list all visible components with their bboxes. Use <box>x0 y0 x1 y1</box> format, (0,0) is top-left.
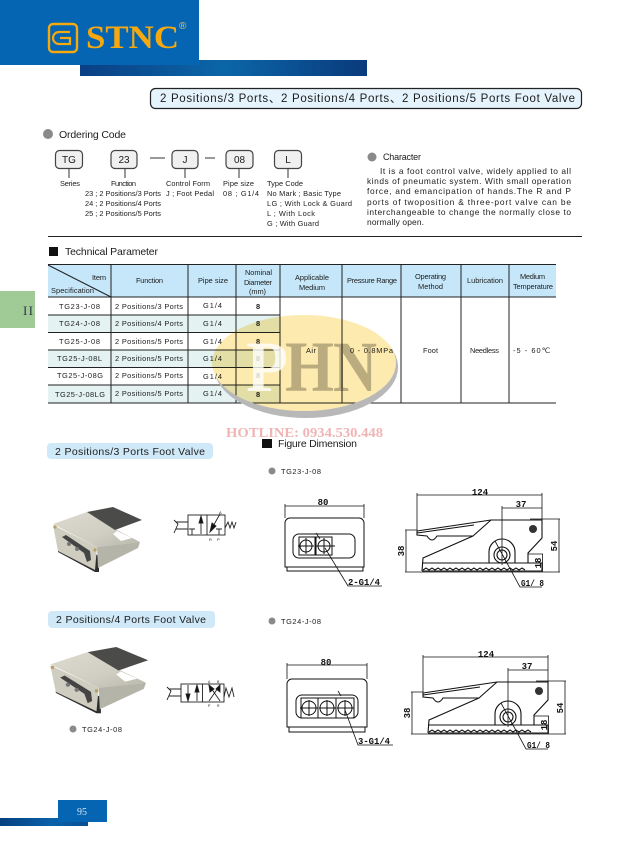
table rows: TG25-J-08L <box>57 354 102 363</box>
code legends: G ; With Guard <box>267 219 319 228</box>
symbol: 4 port valve: B <box>217 680 220 684</box>
table rows: TG25-J-08G <box>57 371 103 380</box>
table values over watermark: Air <box>306 346 317 355</box>
technical parameter heading: Technical Parameter <box>65 246 158 258</box>
table rows: 8 <box>256 337 260 346</box>
connectors <box>69 158 288 178</box>
symbol: 4 port valve: R <box>217 704 220 708</box>
table fills <box>48 265 556 403</box>
code box letters: L <box>285 155 291 166</box>
code box letters: 08 <box>234 155 245 166</box>
code boxes <box>56 150 302 168</box>
table header text: Nominal <box>245 268 272 277</box>
watermark letters: H <box>285 327 334 407</box>
table header text: Temperature <box>513 282 553 291</box>
drawing: TG24 side view <box>403 650 566 751</box>
table rows: 8 <box>256 302 260 311</box>
section pill: 3 ports: 2 Positions/3 Ports Foot Valve <box>55 446 205 458</box>
drawing: TG23 front view: 80 <box>318 498 328 508</box>
drawing label: TG23: TG23-J-08 <box>281 467 321 476</box>
table header text: Item <box>92 273 106 282</box>
table rows: TG25-J-08LG <box>55 390 105 399</box>
table header text: Pressure Range <box>347 276 397 285</box>
character section <box>367 152 571 227</box>
logo icon <box>49 24 77 52</box>
table rows: 8 <box>256 319 260 328</box>
table header text: Operating <box>415 272 446 281</box>
product photo: 4 port valve <box>50 647 148 713</box>
footer page number <box>0 800 107 826</box>
drawing: TG24 front view: 80 <box>321 658 331 668</box>
symbol: 4 port valve <box>167 680 234 708</box>
title pill: 2 Positions/3 Ports、2 Positions/4 Ports、2 Positions/5 Ports Foot Valve <box>160 93 575 105</box>
symbol: 4 port valve: A <box>208 680 211 684</box>
table rows: 2 Positions/5 Ports <box>115 371 183 380</box>
title pill <box>150 88 582 108</box>
code legends: Series <box>60 179 80 188</box>
character paragraph <box>367 166 571 227</box>
watermark letters: P <box>246 327 288 407</box>
table header text: Lubrication <box>467 276 503 285</box>
character paragraph: interchangeable to change the normally close to <box>367 207 571 217</box>
table rows: G1/4 <box>203 319 222 328</box>
symbol: 3 port valve: P <box>217 537 220 542</box>
table header text: Pipe size <box>198 276 228 285</box>
table rows <box>55 301 550 399</box>
drawing: TG23 front view <box>285 498 382 588</box>
drawing: TG24 side view: 124 <box>478 650 495 660</box>
product photo: 3 port valve <box>53 507 142 572</box>
table rows: Needless <box>470 346 499 355</box>
code legends: Pipe size <box>223 179 254 188</box>
code legends: No Mark ; Basic Type <box>267 189 341 198</box>
character paragraph: force, and emancipation of hands.The R and P <box>367 186 571 196</box>
drawing: TG23 side view: 38 <box>397 546 407 556</box>
table rows: 2 Positions/5 Ports <box>115 389 183 398</box>
symbol: 3 port valve: A <box>219 510 222 515</box>
table values over watermark <box>306 346 394 355</box>
drawing: TG23 side view: 37 <box>516 500 526 510</box>
ordering code heading: Ordering Code <box>59 129 126 141</box>
watermark <box>212 315 398 441</box>
drawing: TG23 side view: G1/ 8 <box>521 579 544 589</box>
code legends <box>60 179 352 228</box>
figure dimension heading: Figure Dimension <box>278 438 357 450</box>
drawing: TG23 side view: 54 <box>550 540 560 551</box>
watermark letters: N <box>333 327 377 407</box>
drawing: TG23 side view: 124 <box>472 488 489 498</box>
table rows: G1/4 <box>203 389 222 398</box>
table header text: Method <box>418 282 443 291</box>
drawing: TG23 side view <box>397 488 560 589</box>
code legends: Type Code <box>267 179 303 188</box>
table rows: TG25-J-08 <box>59 337 100 346</box>
side chapter tab: II <box>23 303 33 318</box>
code legends: 08 ; G1/4 <box>223 189 259 198</box>
code legends: J ; Foot Pedal <box>166 189 214 198</box>
drawing: TG24 front view <box>287 658 393 747</box>
table rows: 2 Positions/5 Ports <box>115 354 183 363</box>
code box letters <box>62 155 291 166</box>
table rows: 8 <box>256 390 260 399</box>
logo wordmark: STNC <box>86 20 179 56</box>
table header text: (mm) <box>249 287 266 296</box>
drawing: TG23 side view: 18 <box>534 558 544 568</box>
table rows: TG24-J-08 <box>59 319 100 328</box>
drawing label: TG24: TG24-J-08 <box>281 617 321 626</box>
table rows: G1/4 <box>203 372 222 381</box>
table header text: Applicable <box>295 273 329 282</box>
table header text: Medium <box>520 272 545 281</box>
code box letters: TG <box>62 155 76 166</box>
table rows: 2 Positions/4 Ports <box>115 319 183 328</box>
table rows: -5 - 60℃ <box>513 346 550 355</box>
symbol: 3 port valve <box>174 510 236 542</box>
side chapter tab <box>0 291 35 328</box>
drawing: TG24 side view: 37 <box>522 662 532 672</box>
drawing: TG24 front view: 3-G1/4 <box>358 737 391 747</box>
table rows: G1/4 <box>203 337 222 346</box>
drawing: TG24 side view: 54 <box>556 702 566 713</box>
table header text: Specification <box>51 286 94 295</box>
code legends: 25 ; 2 Positions/5 Ports <box>85 209 161 218</box>
drawing: TG23 front view: 2-G1/4 <box>348 578 381 588</box>
section pill: 4 ports <box>48 611 215 628</box>
table rows: Foot <box>423 346 438 355</box>
code legends: Function <box>111 179 136 188</box>
code box letters: J <box>182 155 188 166</box>
code legends: 23 ; 2 Positions/3 Ports <box>85 189 161 198</box>
table rows: G1/4 <box>203 354 222 363</box>
header banner with logo <box>0 0 367 76</box>
table rows: 8 <box>256 371 260 380</box>
table values over watermark: 0 - 0.8MPa <box>350 346 394 355</box>
code legends: Control Form <box>166 179 210 188</box>
code legends: LG ; With Lock & Guard <box>267 199 352 208</box>
product label: TG24: TG24-J-08 <box>82 725 122 734</box>
table header text <box>51 268 553 296</box>
section pill: 4 ports: 2 Positions/4 Ports Foot Valve <box>56 614 206 626</box>
registered mark: ® <box>179 21 187 32</box>
table rows: 2 Positions/3 Ports <box>115 302 183 311</box>
table rows: G1/4 <box>203 301 222 310</box>
character paragraph: ports of twoposition & three-port valve can be <box>367 197 571 207</box>
drawing: TG24 side view: G1/ 8 <box>527 741 550 751</box>
hotline: HOTLINE: 0934.530.448 <box>226 426 383 441</box>
ordering code section <box>43 129 352 228</box>
drawing: TG24 side view: 18 <box>540 720 550 730</box>
table grid <box>48 264 556 403</box>
code legends: 24 ; 2 Positions/4 Ports <box>85 199 161 208</box>
code box letters: 23 <box>118 155 130 166</box>
symbol: 4 port valve: P <box>208 704 211 708</box>
divider <box>48 236 582 238</box>
section pill: 3 ports <box>47 443 213 459</box>
technical parameter table <box>48 264 556 403</box>
table header text: Medium <box>299 283 325 292</box>
character heading: Character <box>383 152 421 162</box>
table rows: 8 <box>256 354 260 363</box>
character paragraph: It is a foot control valve, widely applied to all <box>380 166 571 176</box>
drawing: TG24 side view: 38 <box>403 708 413 718</box>
character paragraph: normally open. <box>367 217 424 227</box>
table header text: Diameter <box>244 278 273 287</box>
watermark ellipse <box>212 315 398 418</box>
watermark letters <box>246 327 377 407</box>
table rows: 2 Positions/5 Ports <box>115 337 183 346</box>
footer page number: 95 <box>77 807 87 818</box>
table header text: Function <box>136 276 163 285</box>
symbol: 3 port valve: R <box>209 537 212 542</box>
code legends: L ; With Lock <box>267 209 315 218</box>
table rows: TG23-J-08 <box>59 302 100 311</box>
character paragraph: kinds of pneumatic system. With small operation <box>367 176 571 186</box>
